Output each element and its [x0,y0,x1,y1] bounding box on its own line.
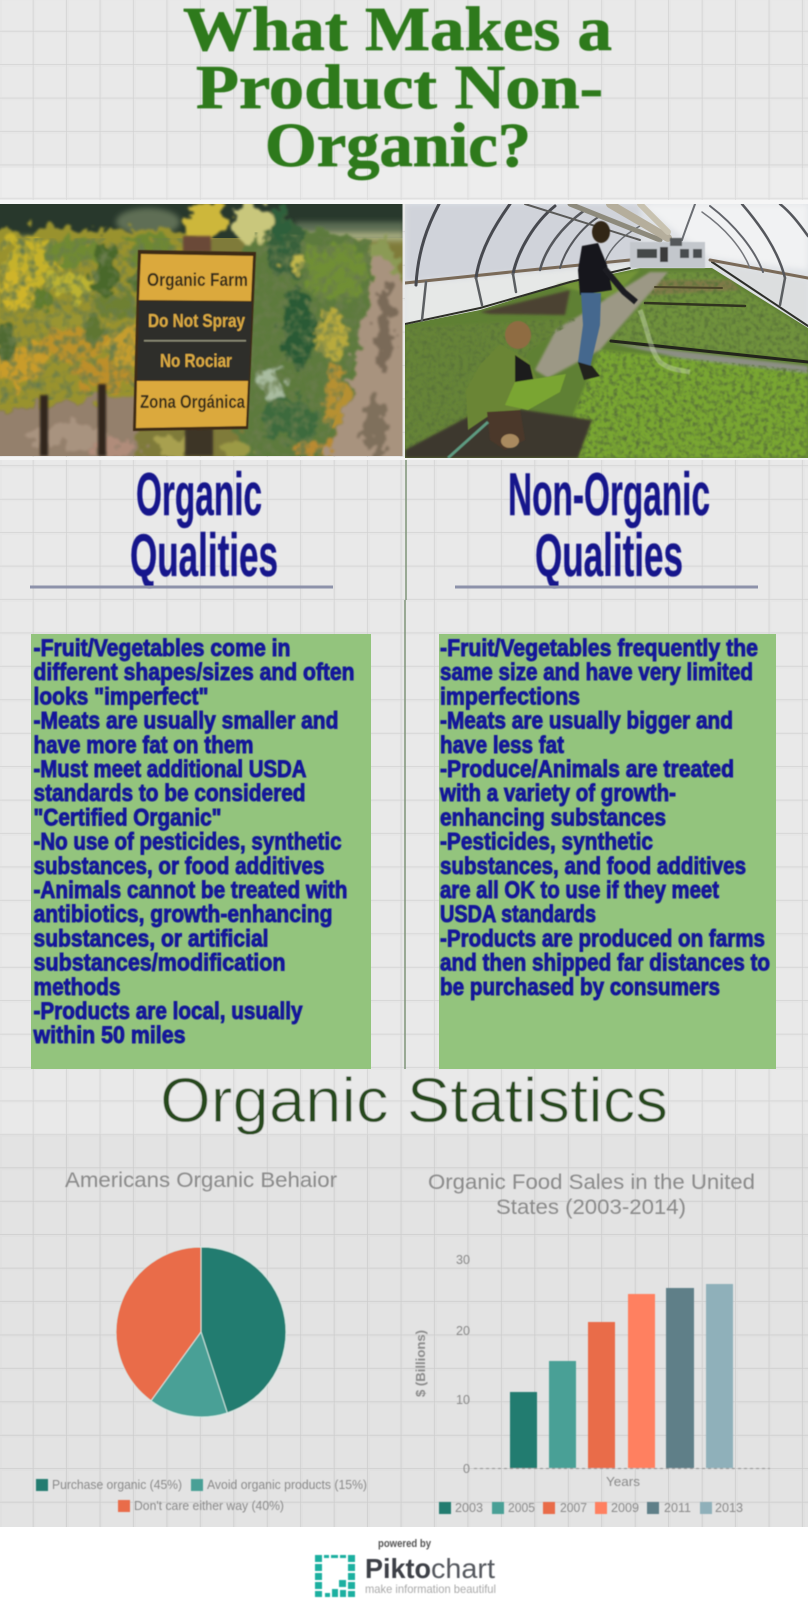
vertical divider [405,460,406,1069]
text: non-organic list: -Fruit/Vegetables frequently the [440,635,758,662]
text: non-organic list: -Meats are usually bigger and [440,708,733,735]
standing man watering [578,221,690,380]
right vines [238,225,372,460]
text: non-organic list: -Pesticides, synthetic [440,829,653,856]
pie legend: Purchase organic (45%) [52,1477,182,1492]
title: Product Non- [196,54,603,122]
text: organic list: different shapes/sizes and often [34,659,354,686]
text: organic list: within 50 miles [33,1022,185,1049]
powered by: powered by [378,1538,432,1550]
text: organic list: standards to be considered [34,780,306,807]
bar legend: 2003 [455,1500,483,1515]
panel: non-organic qualities [439,634,776,1069]
plant texture [405,318,580,452]
title [183,0,612,180]
pie chart panel: americans organic behavior [36,1169,367,1513]
underline: non-organic [455,586,758,588]
kneeling man [448,321,566,458]
text: non-organic list: enhancing substances [440,804,666,831]
wordmark: Pikto [365,1553,431,1584]
foliage shading [0,238,190,405]
sign: Organic Farm [147,270,248,290]
text: organic list: antibiotics, growth-enhancing [34,901,332,928]
tagline: make information beautiful [365,1582,496,1596]
heading: organic qualities [130,461,278,589]
bar legend: 2007 [560,1500,587,1515]
y axis labels: 0 [463,1461,470,1476]
text: non-organic list: be purchased by consumers [440,974,720,1001]
text: non-organic list: have less fat [440,732,564,759]
text: organic list: -Animals cannot be treated with [34,877,348,904]
text: non-organic list: with a variety of growth- [439,780,676,807]
text: organic list: substances, or food additives [34,853,324,880]
text: organic list: substances/modification [34,950,286,977]
footer band [0,1527,808,1608]
top vine [185,204,225,240]
x axis label: Years [606,1474,641,1489]
wordmark: chart [431,1553,495,1584]
bar chart title: States (2003-2014) [496,1196,686,1219]
bar legend: 2009 [611,1500,639,1515]
text: non-organic list: -Produce/Animals are treated [440,756,734,783]
bars [510,1284,733,1468]
photo: workers in greenhouse [405,204,808,458]
wordmark [365,1553,495,1584]
y axis labels: $ (Billions) [413,1330,428,1397]
bar chart title [428,1171,755,1219]
y axis labels [413,1252,470,1476]
bar chart panel: organic food sales [413,1171,770,1515]
sign: No Rociar [160,351,232,371]
photo: organic farm sign in vineyard [0,202,420,470]
ground [0,390,150,456]
text: organic list: -Meats are usually smaller and [34,708,338,735]
heading: non-organic qualities: Qualities [535,522,683,589]
text: organic list: "Certified Organic" [34,804,222,831]
text: non-organic list: USDA standards [440,901,596,928]
right ground [325,255,420,470]
heading: organic qualities: Organic [136,461,262,528]
y axis labels: 20 [456,1323,470,1338]
y axis labels: 30 [456,1252,470,1267]
pie legend [36,1477,367,1513]
pie legend: Don't care either way (40%) [134,1498,284,1513]
text: organic list: -Products are local, usually [34,998,303,1025]
pie legend: Avoid organic products (15%) [207,1477,367,1492]
footer: piktochart branding [315,1538,496,1597]
underline: organic [30,586,333,588]
pie chart title: Americans Organic Behaior [65,1169,337,1192]
bar chart title: Organic Food Sales in the United [428,1171,755,1194]
text: non-organic list: substances, and food additives [440,853,746,880]
greenhouse floor [405,268,808,458]
bar legend: 2013 [715,1500,743,1515]
text: organic list: methods [34,974,120,1001]
sign [133,250,256,431]
text: non-organic list: -Products are produced on farms [440,925,765,952]
text: organic list: -Must meet additional USDA [34,756,306,783]
icon: piktochart logo [315,1555,355,1597]
pie chart [116,1247,286,1417]
text: non-organic list: same size and have very limited [440,659,753,686]
text: non-organic list: are all OK to use if they meet [440,877,719,904]
panel: organic qualities [31,634,371,1069]
bar legend: 2005 [508,1500,535,1515]
heading: organic statistics: Organic Statistics [160,1066,668,1136]
text: organic list: -No use of pesticides, synthetic [34,829,342,856]
bar legend: 2011 [664,1500,691,1515]
text: organic list: looks "imperfect" [34,683,208,710]
text: organic list: have more fat on them [34,732,254,759]
text: organic list: substances, or artificial [34,925,268,952]
text: non-organic list [439,635,770,1001]
text: non-organic list: imperfections [440,683,580,710]
sign: Zona Orgánica [140,392,246,412]
heading: non-organic qualities [508,461,710,589]
back wall of greenhouse [630,238,705,268]
sign: Do Not Spray [148,311,245,331]
left vines [0,228,195,412]
text: organic list: -Fruit/Vegetables come in [34,635,290,662]
y axis labels: 10 [456,1392,470,1407]
bar legend [439,1500,743,1515]
heading: organic qualities: Qualities [130,522,278,589]
text: organic list [33,635,354,1049]
title: Organic? [265,112,531,180]
